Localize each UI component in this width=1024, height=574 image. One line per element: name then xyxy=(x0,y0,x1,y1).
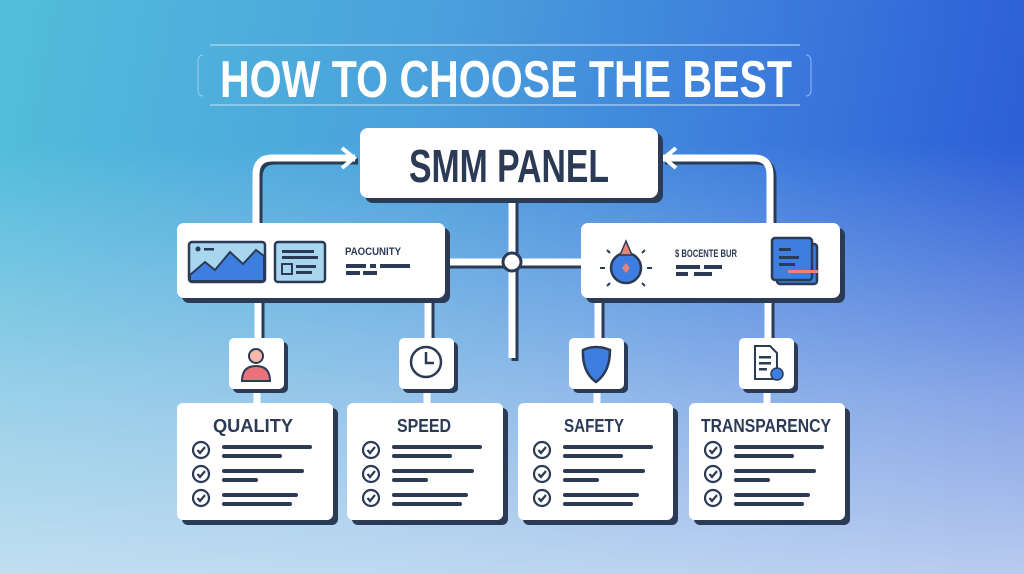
icon boxes xyxy=(229,338,798,393)
card: transparency xyxy=(689,403,850,525)
right panel xyxy=(581,223,845,303)
left panel xyxy=(177,223,450,303)
icon: doc check xyxy=(755,346,783,380)
hub circle xyxy=(503,253,521,271)
icon: chart xyxy=(189,242,265,282)
right panel: $ BOCENTE BUR xyxy=(675,248,737,260)
connectors xyxy=(259,161,773,361)
label: PAOCUNITY xyxy=(345,246,402,258)
SMM panel box xyxy=(360,128,663,203)
icon: compass xyxy=(600,241,652,286)
icon: card xyxy=(275,242,325,282)
icon: document xyxy=(772,238,818,284)
card: safety: SAFETY xyxy=(564,416,624,436)
card: quality: QUALITY xyxy=(213,416,293,436)
icon: person xyxy=(242,349,270,381)
arrows xyxy=(342,148,676,168)
card: quality xyxy=(177,403,338,525)
card: speed: SPEED xyxy=(397,416,451,436)
card: safety xyxy=(518,403,678,525)
SMM panel box: SMM PANEL xyxy=(409,140,609,192)
icon: clock xyxy=(411,347,441,377)
card: speed xyxy=(347,403,508,525)
title banner: HOW TO CHOOSE THE BEST xyxy=(220,51,792,109)
icon: shield xyxy=(583,347,610,382)
card: transparency: TRANSPARENCY xyxy=(701,416,831,436)
